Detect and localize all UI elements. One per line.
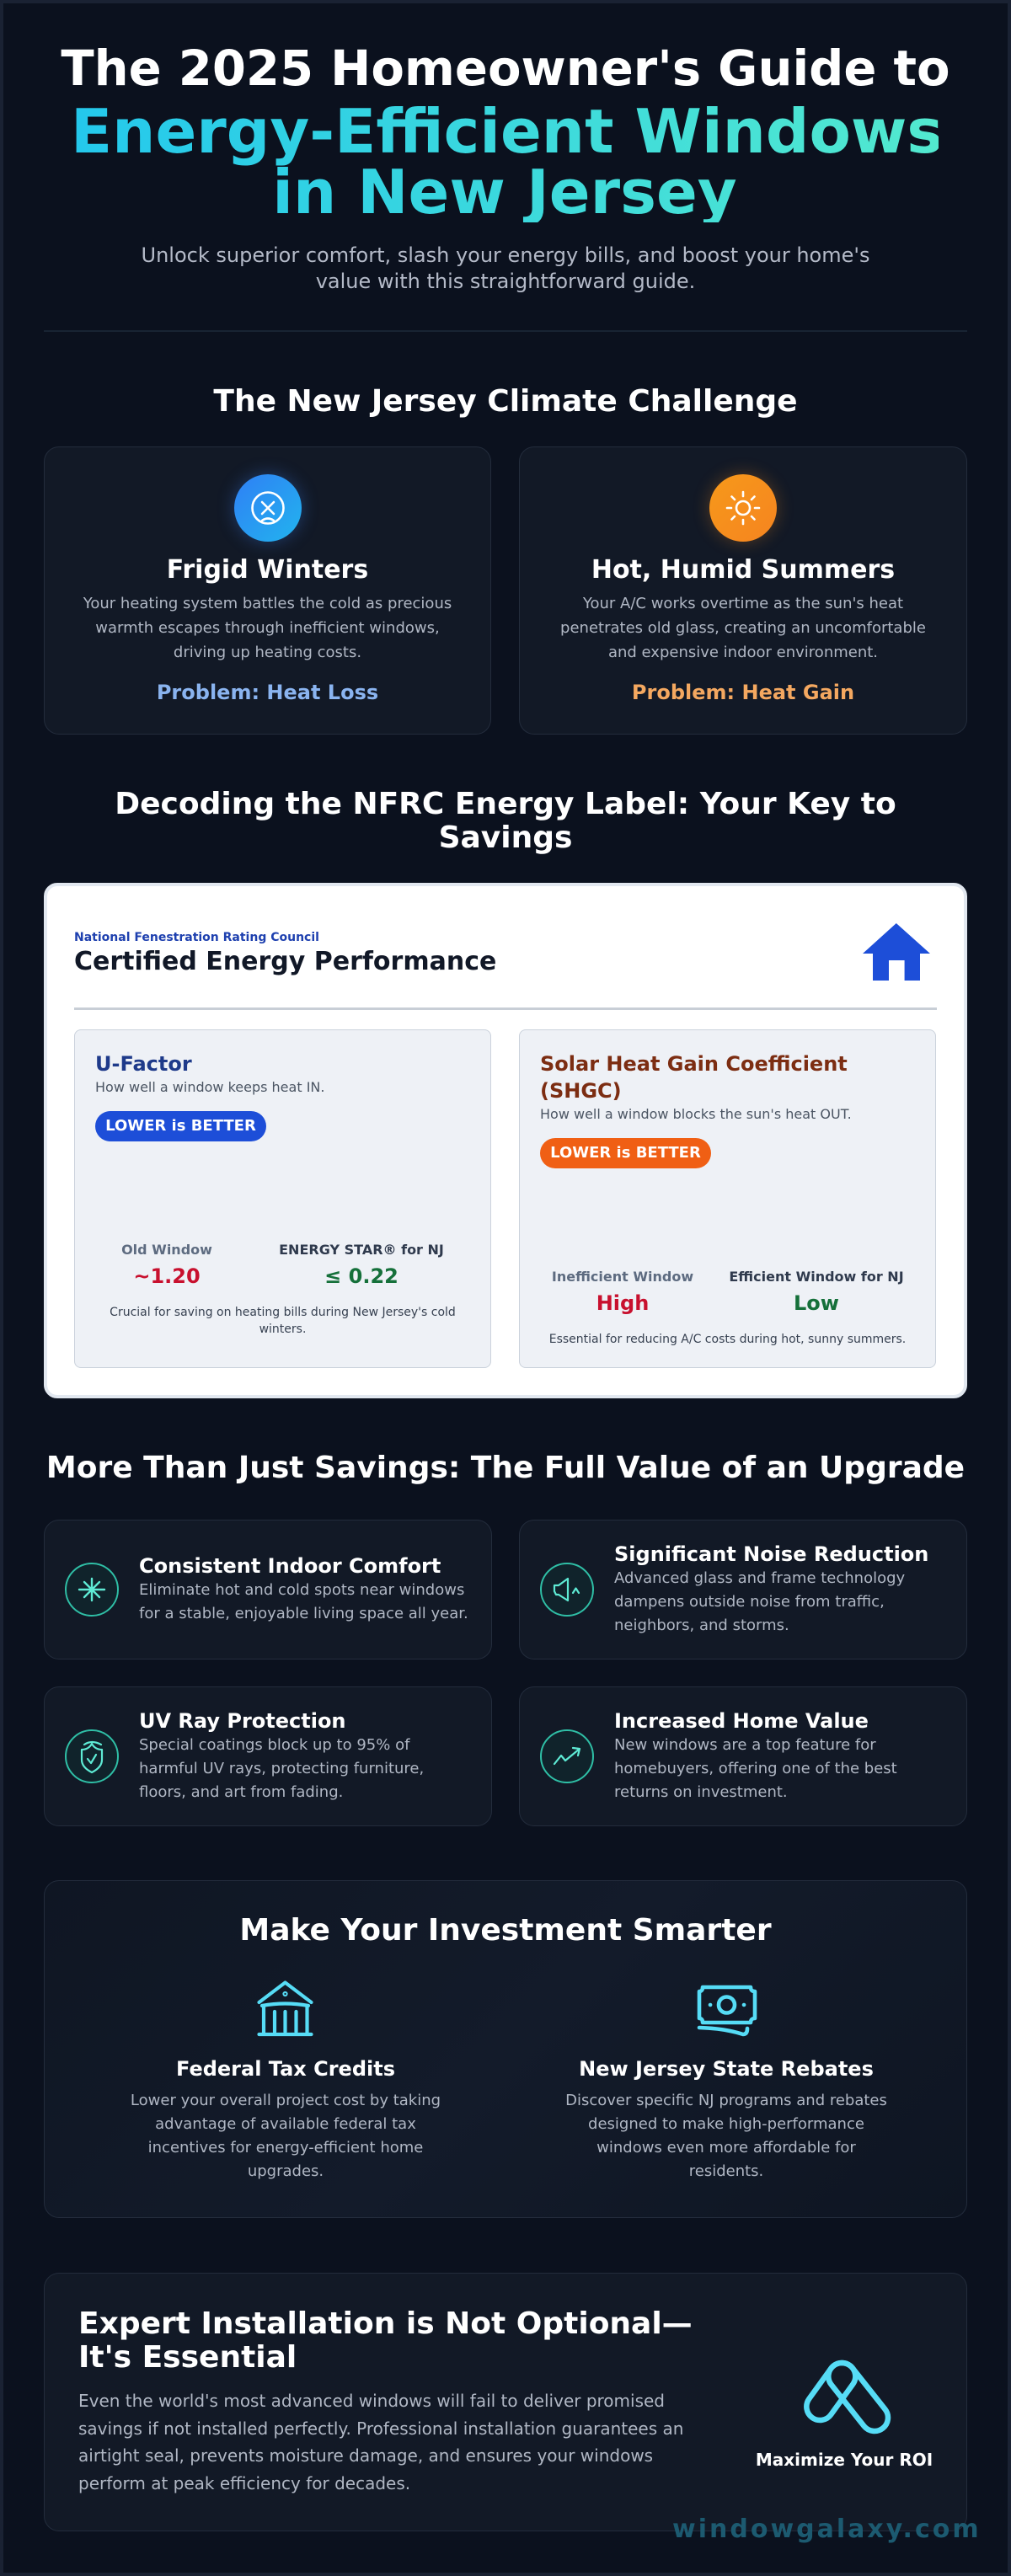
body text: homebuyers, offering one of the best (614, 1760, 897, 1777)
body text: penetrates old glass, creating an uncomfortable (560, 619, 926, 637)
body text: harmful UV rays, protecting furniture, (139, 1760, 424, 1777)
subtitle (142, 243, 869, 293)
heading: UV Ray Protection (139, 1709, 346, 1733)
note: Essential for reducing A/C costs during hot, sunny summers. (549, 1333, 906, 1346)
body text: incentives for energy-efficient home (148, 2139, 423, 2156)
body text: perform at peak efficiency for decades. (78, 2473, 410, 2493)
heading: full value: More Than Just Savings: The Full Value of an Upgrade (46, 1451, 965, 1485)
body text: savings if not installed perfectly. Professional installation guarantees an (78, 2418, 683, 2438)
panel: expert installation (44, 2273, 967, 2531)
pill (540, 1138, 711, 1168)
heading: NFRC label: Savings (439, 820, 572, 855)
column: state rebates (565, 1985, 887, 2180)
council name: National Fenestration Rating Council (74, 931, 319, 944)
body text: residents. (689, 2162, 763, 2180)
metric description: How well a window keeps heat IN. (95, 1079, 324, 1095)
body text: and expensive indoor environment. (608, 644, 878, 661)
value: ≤ 0.22 (324, 1264, 399, 1288)
metric description: How well a window blocks the sun's heat OUT. (540, 1106, 852, 1122)
label: ENERGY STAR® for NJ (279, 1242, 444, 1258)
panel: UV protection (44, 1686, 492, 1826)
watermark: windowgalaxy.com (672, 2515, 982, 2544)
heading: climate challenge: The New Jersey Climate Challenge (213, 384, 798, 419)
body text: Discover specific NJ programs and rebates (565, 2092, 887, 2109)
body text (131, 2092, 441, 2180)
panel: home value (519, 1686, 967, 1826)
label: Maximize Your ROI (756, 2450, 933, 2470)
note: Crucial for saving on heating bills during New Jersey's cold (110, 1306, 456, 1319)
value: Low (794, 1291, 839, 1315)
body text: advantage of available federal tax (155, 2115, 416, 2133)
label: Efficient Window for NJ (729, 1269, 904, 1285)
heading: New Jersey State Rebates (579, 2057, 874, 2081)
column: federal tax credits (131, 1980, 441, 2180)
metric title: U-Factor (95, 1052, 192, 1076)
problem label: Problem: Heat Gain (632, 681, 854, 704)
panel: indoor comfort (44, 1520, 492, 1659)
body text: Special coatings block up to 95% of (139, 1736, 409, 1754)
metric title (540, 1052, 848, 1103)
problem label: Problem: Heat Loss (157, 681, 378, 704)
metric title: (SHGC) (540, 1079, 622, 1103)
heading: Frigid Winters (167, 555, 368, 585)
header: title and subtitle (61, 40, 950, 293)
body text: Lower your overall project cost by taking (131, 2092, 441, 2109)
label: Old Window (121, 1242, 212, 1258)
body text (83, 595, 452, 661)
panel: U-Factor (74, 1029, 491, 1368)
icon: asterisk (65, 1563, 119, 1617)
body text: returns on investment. (614, 1783, 788, 1801)
body text (78, 2391, 683, 2493)
title line: The 2025 Homeowner's Guide to (61, 40, 950, 97)
body text: Advanced glass and frame technology (614, 1569, 905, 1587)
icon: sun (709, 474, 777, 542)
icon: bank (257, 1980, 313, 2037)
body text: New windows are a top feature for (614, 1736, 876, 1754)
callout: ROI (756, 2360, 933, 2470)
body text: designed to make high-performance (588, 2115, 864, 2133)
panel: frigid winters (44, 446, 491, 735)
heading: NFRC label (115, 787, 896, 855)
value: High (596, 1291, 649, 1315)
body text: Your A/C works overtime as the sun's heat (583, 595, 903, 612)
body text (139, 1581, 468, 1622)
old window value (121, 1242, 212, 1288)
title highlight (71, 101, 939, 222)
body text (565, 2092, 887, 2180)
icon: capsules (804, 2360, 891, 2434)
value: ~1.20 (133, 1264, 201, 1288)
pill (95, 1111, 266, 1141)
body text (560, 595, 926, 661)
heading: Expert Installation is Not Optional— (78, 2306, 693, 2341)
icon: house (863, 923, 930, 981)
icon: speaker (540, 1563, 594, 1617)
panel: NFRC label card (44, 883, 967, 1398)
body text: Even the world's most advanced windows will fail to deliver promised (78, 2391, 665, 2411)
heading: Federal Tax Credits (176, 2057, 395, 2081)
body text: neighbors, and storms. (614, 1617, 789, 1634)
icon: shield (65, 1729, 119, 1783)
body text: floors, and art from fading. (139, 1783, 343, 1801)
heading: Hot, Humid Summers (591, 555, 895, 585)
panel: investment (44, 1880, 967, 2218)
body text (139, 1736, 424, 1801)
heading: Increased Home Value (614, 1709, 869, 1733)
body text: upgrades. (248, 2162, 324, 2180)
heading: Consistent Indoor Comfort (139, 1554, 441, 1578)
body text: dampens outside noise from traffic, (614, 1593, 885, 1611)
label: Inefficient Window (552, 1269, 693, 1285)
efficient window value (729, 1269, 904, 1315)
body text: for a stable, enjoyable living space all year. (139, 1605, 468, 1622)
body text (614, 1569, 905, 1634)
panel: noise reduction (519, 1520, 967, 1659)
card title: Certified Energy Performance (74, 947, 496, 976)
note: winters. (259, 1323, 306, 1336)
panel: humid summers (519, 446, 967, 735)
body text (614, 1736, 897, 1801)
icon: trend (540, 1729, 594, 1783)
inefficient window value (552, 1269, 693, 1315)
body text: warmth escapes through inefficient windows, (95, 619, 440, 637)
metric title: Solar Heat Gain Coefficient (540, 1052, 848, 1076)
heading: Make Your Investment Smarter (239, 1913, 772, 1948)
icon: cold (234, 474, 302, 542)
heading: It's Essential (78, 2340, 297, 2375)
icon: money (698, 1985, 757, 2037)
body text: Eliminate hot and cold spots near windows (139, 1581, 464, 1599)
pill: LOWER is BETTER (105, 1117, 256, 1135)
pill: LOWER is BETTER (550, 1144, 701, 1162)
heading: Significant Noise Reduction (614, 1542, 928, 1566)
heading: NFRC label: Decoding the NFRC Energy Label: Your Key to (115, 787, 896, 821)
title highlight: Energy-Efficient Windows (71, 96, 943, 167)
body text: Your heating system battles the cold as precious (83, 595, 452, 612)
body text: driving up heating costs. (174, 644, 361, 661)
title highlight: in New Jersey (272, 157, 737, 227)
note (110, 1306, 456, 1336)
subtitle: Unlock superior comfort, slash your energy bills, and boost your home's (142, 243, 869, 267)
body text: windows even more affordable for (596, 2139, 856, 2156)
panel: SHGC (519, 1029, 936, 1368)
heading (78, 2306, 693, 2375)
energy star value (279, 1242, 444, 1288)
subtitle: value with this straightforward guide. (316, 270, 695, 293)
body text: airtight seal, prevents moisture damage, and ensures your windows (78, 2445, 653, 2466)
